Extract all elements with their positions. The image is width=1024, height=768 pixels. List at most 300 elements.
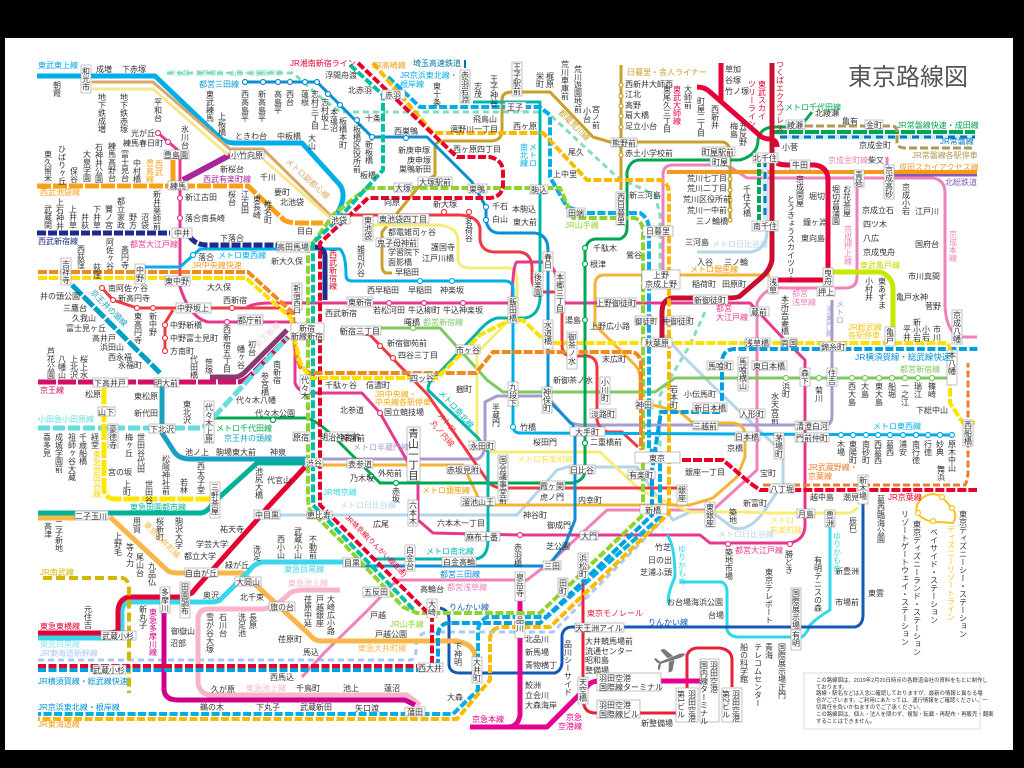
station labels: east: 一之江: [900, 382, 910, 407]
station labels: centre: 日比谷: [570, 465, 594, 475]
station labels: north-east: 八広: [863, 234, 879, 243]
station labels: north-east: 三ノ輪橋: [696, 216, 728, 226]
station labels: south-centre: 矢口渡: [355, 703, 379, 713]
station labels: west: 参宮橋: [260, 371, 270, 397]
station labels: north-west: 東武練馬: [206, 89, 214, 123]
station labels: centre: 西早稲田: [367, 285, 399, 295]
station labels: north-east: 竹ノ塚: [725, 86, 749, 96]
station labels: east: 南砂町: [862, 439, 870, 464]
station labels: north-west: 練馬春日町: [123, 138, 163, 148]
line name labels: 西武新宿線: [328, 250, 338, 291]
station labels: south-west: 都立大学: [184, 551, 216, 561]
line: Yokosuka: [38, 349, 978, 670]
station labels: north-centre: 護国寺: [431, 242, 455, 252]
line name labels: 各駅停車: [848, 330, 880, 340]
station labels: north-east: 本所吾妻橋: [780, 294, 790, 336]
station labels: north-centre: 志茂: [474, 81, 482, 99]
station labels: north-west: 吉祥寺: [62, 260, 70, 284]
station labels: centre: 大手町: [575, 427, 599, 437]
station labels: south-west: 学芸大学: [196, 539, 228, 549]
line: Narita Sky Access: [667, 170, 977, 174]
line name labels: 都営三田線: [199, 79, 239, 89]
station labels: west: 松原: [85, 389, 101, 399]
station labels: north-west: 下赤塚: [122, 65, 146, 74]
line: Tobu Kameido: [833, 272, 893, 335]
line: Namboku: [373, 102, 540, 559]
station labels: west: 西太子堂: [196, 462, 206, 494]
station labels: east: 馬喰横山: [738, 358, 748, 390]
station labels: west: 中野新橋: [170, 320, 202, 330]
station labels: east: 南行徳: [912, 439, 920, 465]
station labels: north-west: 新大久保: [271, 256, 303, 266]
station labels: west: 都庁前: [238, 315, 262, 325]
station labels: north-east: 西新井: [710, 105, 720, 130]
station labels: north-west: 武蔵関: [44, 204, 52, 230]
line name labels: メトロ: [528, 143, 538, 167]
station labels: east: 東大島: [874, 381, 884, 407]
station labels: north-west: 大久保: [207, 282, 231, 292]
station labels: north-centre: 扇大橋: [625, 110, 649, 120]
line name labels: 中央線各駅停車: [375, 397, 431, 407]
station labels: north-centre: 新三河島: [629, 190, 661, 200]
line: Shonan-Shinjuku: [38, 63, 503, 666]
line name labels: 京王新線: [252, 320, 282, 349]
title: 東京路線図: [848, 64, 968, 91]
station labels: south-west: 千鳥町: [296, 683, 320, 693]
station labels: south-west: 高津: [44, 521, 52, 539]
station labels: north-east: 青砥: [854, 170, 864, 187]
station labels: west: 山下: [98, 408, 114, 417]
station labels: west: 芦花公園: [46, 346, 56, 380]
line name labels: メトロ日比谷線: [712, 239, 768, 249]
line name labels: JR常磐線快速・成田線: [897, 120, 979, 130]
station labels: north-east: 市川真間: [908, 271, 940, 281]
station labels: south-centre: 昭和島: [585, 655, 609, 665]
line name labels: 半蔵門線: [826, 304, 834, 338]
station labels: south-centre: 下神明: [454, 642, 462, 667]
station labels: west: [40, 283, 360, 520]
station labels: south-centre: 品川シーサイド: [564, 640, 572, 696]
station labels: north-west: 地下鉄赤塚: [120, 92, 128, 134]
line: Rinkai: [440, 502, 863, 673]
station labels: north-centre: 上中里: [553, 169, 577, 179]
station labels: north-east: 綾瀬: [787, 120, 803, 130]
station labels: west: 富士見ヶ丘: [66, 323, 106, 333]
station labels: south-centre: 目黒: [344, 559, 360, 568]
line: Tokaido Shinkansen: [38, 520, 663, 660]
station labels: west: 明治神宮前: [320, 432, 360, 442]
station labels: east: 森下: [800, 368, 810, 386]
line: Setagaya: [104, 388, 213, 499]
station labels: south-west: 桜新町: [156, 516, 164, 541]
station labels: centre: 岩本町: [670, 384, 678, 409]
station labels: south-centre: お台場海浜公園: [667, 597, 723, 607]
station labels: north-centre: 日暮里: [646, 226, 670, 236]
station labels: south-west: 武蔵新田: [300, 702, 332, 712]
station labels: north-west: 新桜台: [220, 164, 244, 174]
station labels: west: 三鷹台: [63, 303, 87, 313]
station labels: north-centre: 西新井大師西: [625, 79, 673, 89]
station labels: west: 豪徳寺: [108, 424, 118, 449]
station labels: north-east: 四ツ木: [863, 219, 887, 229]
line: Keio New: [210, 330, 287, 377]
line: Chiyoda: [213, 112, 812, 483]
station labels: south-centre: 大崎: [428, 599, 436, 616]
station labels: south-centre: 六本木: [408, 500, 418, 526]
station labels: north-centre: 板橋区役所前: [352, 124, 362, 174]
station labels: west: 神泉: [270, 447, 286, 457]
station labels: north-centre: 早稲田: [395, 267, 419, 277]
station labels: south-west: 石川台: [218, 613, 228, 638]
station labels: west: 池尻大橋: [254, 466, 264, 500]
line: Ikegami: [198, 590, 420, 705]
station labels: west: 代々木: [300, 375, 310, 401]
station labels: west: 世田谷: [144, 479, 154, 505]
station labels: north-east: 堀切菖蒲園: [832, 185, 840, 226]
disclaimer panel: することはできません。: [816, 718, 875, 725]
station labels: north-east: 稲荷町: [692, 279, 716, 289]
line name labels: 日暮里・舎人ライナー: [627, 67, 707, 77]
station labels: south-centre: 市場前: [835, 597, 859, 607]
station labels: north-centre: 十条: [365, 113, 381, 123]
line: Toyoko: [38, 467, 305, 633]
line: Keisei main: [663, 165, 977, 337]
station labels: north-west: 沼袋: [140, 213, 150, 230]
station labels: north-west: 高円寺: [120, 244, 130, 269]
station labels: north-centre: 東池袋: [364, 215, 372, 241]
station labels: south-west: 大崎広小路: [326, 594, 336, 635]
station labels: north-centre: 西日暮里: [616, 193, 626, 225]
station labels: east: 錦糸町: [821, 342, 845, 352]
line name labels: 東武亀戸線: [860, 260, 900, 270]
station labels: south-centre: 辰巳: [848, 517, 858, 533]
station labels: centre: 乃木坂: [350, 473, 374, 483]
line name labels: メトロ千代田線: [785, 102, 841, 112]
station labels: west: 新代田: [134, 408, 158, 418]
station labels: south-centre: 羽田空港: [599, 700, 631, 710]
station labels: south-west: 上野毛: [114, 532, 122, 556]
station labels: centre: 神田: [636, 400, 652, 410]
station labels: north-centre: 新庚申塚: [398, 145, 430, 155]
station labels: north-east: 小村井: [864, 277, 874, 302]
line name labels: JR山手線: [565, 220, 599, 230]
station labels: north-east: 牛田: [792, 160, 808, 170]
station labels: west: 浜田山: [100, 342, 124, 352]
station labels: north-west: 西台: [286, 90, 294, 107]
station labels: west: 新中野: [148, 312, 158, 336]
line: Keikyu main: [470, 600, 700, 727]
line name labels: JR東海道線: [38, 719, 80, 729]
station labels: south-west: 雪が谷大塚: [206, 613, 214, 654]
line: Saikyo: [313, 65, 414, 610]
station labels: south-west: 二子玉川: [75, 512, 107, 521]
station labels: west: 西武新宿: [325, 308, 357, 318]
station labels: east: 日本橋: [735, 432, 759, 442]
station labels: north-east: 三河島: [685, 237, 709, 247]
station labels: east: 浜町: [782, 381, 790, 398]
station labels: centre: 神楽坂: [440, 285, 464, 295]
station labels: north-east: 町屋二丁目: [696, 97, 706, 138]
station labels: north-centre: 梶原: [546, 71, 554, 88]
line name labels: 東京モノレール: [587, 608, 643, 618]
station labels: north-west: 荻窪: [92, 262, 102, 280]
station labels: south-centre: 有明: [792, 630, 800, 648]
station labels: south-centre: 船の科学館: [740, 642, 748, 684]
station labels: south-centre: 立会川: [525, 690, 549, 700]
line name labels: メトロ銀座線: [422, 485, 470, 495]
station labels: centre: 霞ヶ関: [540, 482, 564, 491]
station labels: east: 銀座: [678, 485, 686, 503]
station labels: east: 小伝馬町: [684, 389, 716, 399]
station labels: north-east: 北綾瀬: [815, 108, 839, 118]
line name labels: 京葉線: [808, 471, 832, 481]
station labels: south-centre: 北品川: [525, 635, 549, 644]
station labels: north-centre: 向原: [384, 197, 400, 207]
station labels: east: 葛西臨海公園: [876, 494, 886, 544]
station labels: west: 上北沢: [70, 355, 78, 380]
station labels: east: 下総中山: [916, 405, 948, 415]
station labels: south-west: [44, 511, 336, 712]
line: Hanzomon: [323, 300, 832, 459]
station labels: north-east: 田原町: [722, 280, 746, 289]
station labels: centre: 東京: [649, 453, 665, 463]
station labels: south-centre: 新馬場: [525, 647, 549, 657]
line name labels: JR京浜東北線・: [400, 70, 458, 80]
line name labels: メトロ日比谷線: [340, 500, 396, 510]
station labels: north-centre: 後楽園: [534, 272, 542, 298]
station labels: north-centre: 江戸川橋: [422, 253, 454, 263]
station labels: east: 新日本橋: [694, 403, 726, 413]
station labels: west: 喜多見: [42, 432, 52, 458]
station labels: centre: 東新宿: [348, 297, 372, 307]
station labels: north-west: 新高島平: [258, 90, 266, 123]
line: Disney Resort: [916, 494, 955, 523]
station labels: east: 水天宮前: [770, 391, 780, 425]
line name labels: 東急東横線: [40, 621, 80, 631]
line: Monorail: [583, 580, 732, 713]
station labels: centre: 虎ノ門: [540, 492, 564, 502]
station labels: north-centre: 東尾久三丁目: [662, 84, 672, 134]
station labels: north-west: 千川: [260, 172, 276, 182]
station labels: south-centre: 大井町: [472, 657, 482, 682]
station labels: south-centre: 五反田: [364, 588, 388, 597]
line: Oedo: [158, 133, 805, 543]
station labels: north-centre: 荒川遊園地前: [574, 64, 582, 114]
station labels: east: 東日本橋: [753, 361, 785, 371]
station labels: east: 両国: [781, 339, 797, 348]
line name labels: JR京浜東北線・根岸線: [38, 702, 120, 712]
station labels: north-east: 小菅: [782, 142, 798, 152]
station labels: centre: 永田町: [470, 441, 494, 451]
station labels: north-west: 新江古田: [185, 192, 217, 202]
station labels: centre: 神保町: [542, 387, 552, 412]
station labels: east: 行徳: [924, 439, 932, 457]
station labels: centre: 秋葉原: [645, 338, 669, 348]
station labels: north-east: 京成曳舟: [863, 247, 895, 257]
line: Tozai: [143, 249, 952, 435]
line: Yamanote: [308, 188, 643, 613]
station labels: centre: 青山一丁目: [407, 427, 419, 480]
line: Yurakucho north: [373, 225, 517, 450]
station labels: north-west: 落合: [198, 252, 214, 262]
line name labels: りんかい線: [648, 617, 688, 627]
station labels: north-centre: 飯田橋: [508, 298, 518, 323]
line: Nambu: [43, 578, 129, 693]
station labels: north-centre: 王子神谷: [490, 75, 498, 108]
station labels: north-west: 上板橋: [218, 112, 226, 137]
station labels: east: 茅場町: [774, 433, 784, 458]
line: Tsukuba Express: [662, 63, 772, 340]
station labels: south-west: 二子新地: [54, 520, 64, 552]
station labels: south-centre: 御成門: [547, 520, 571, 530]
station labels: west: 駒場東大前: [216, 447, 256, 457]
station labels: north-east: 草加: [725, 64, 741, 74]
station labels: Tokyo Disney Resort: 東京ディズニーシー・ステーション: [958, 509, 968, 638]
station labels: west: 新高円寺: [118, 293, 150, 303]
disclaimer panel: 合がございます。ご利用にあたっては、運行情報をご確認ください。一: [816, 696, 988, 704]
station labels: south-west: 荏原中延: [304, 595, 312, 628]
station labels: south-centre: 整備場: [585, 665, 609, 675]
station labels: north-centre: 鶯谷: [626, 250, 642, 260]
station labels: north-centre: 茗荷谷: [464, 217, 474, 243]
station labels: north-east: 大師前: [684, 84, 692, 110]
station labels: centre: 九段下: [508, 383, 518, 408]
station labels: south-west: 沼部: [170, 639, 186, 648]
station labels: south-west: 新丸子: [138, 605, 148, 630]
station labels: north-west: 桜台: [228, 189, 236, 207]
station labels: north-centre: 大塚駅前: [419, 177, 451, 187]
station labels: north-centre: 千石: [492, 201, 508, 211]
station labels: north-east: 堀切: [809, 192, 825, 201]
station labels: west: 西永福: [108, 352, 132, 362]
line end marker: Saitama Rapid Railway: [464, 60, 466, 68]
station labels: north-west: 中村橋: [132, 158, 142, 184]
station labels: centre: 国会議事堂前: [498, 456, 508, 505]
station labels: centre: 蔵前: [751, 307, 767, 317]
station labels: centre: 湯島: [565, 315, 581, 325]
station labels: north-centre: 京成上野: [645, 279, 677, 289]
line name labels: ディズニーリゾートライン: [946, 524, 956, 621]
line name labels: 東急池上線: [288, 578, 328, 588]
station labels: east: 新富町: [743, 498, 767, 508]
line: Shinkansen Joetsu/Tohoku: [167, 73, 705, 450]
station labels: west: 中野富士見町: [170, 333, 218, 343]
station labels: west: 幡ヶ谷: [236, 344, 246, 370]
line name labels: 埼玉高速鉄道: [413, 58, 461, 68]
station labels: north-east: 町屋駅前: [702, 147, 734, 157]
line name labels: 東急大井町線: [358, 643, 406, 653]
disclaimer panel: ております。: [816, 684, 848, 691]
station labels: north-centre: 足立小台: [625, 121, 657, 131]
line name labels: 東急目黒線: [284, 564, 324, 574]
station labels: west: 代々木八幡: [236, 395, 276, 405]
station labels: centre: 麹町: [456, 384, 472, 394]
station labels: centre: 上野御徒町: [596, 298, 636, 308]
station labels: north-centre: 東大前: [513, 217, 537, 227]
line name labels: 有楽町線: [770, 525, 802, 535]
line name labels: 京成本線: [948, 230, 958, 263]
station labels: west: 南新宿: [272, 359, 282, 385]
line name labels: JR南武線: [40, 567, 74, 577]
line name labels: 京急本線: [472, 714, 504, 724]
station labels: south-centre: 国際展示場: [792, 589, 800, 630]
line name labels: 都営浅草線: [447, 582, 487, 592]
station labels: north-east: 柴又: [868, 155, 884, 165]
station labels: Tokyo Disney Resort: [900, 509, 968, 656]
station labels: south-west: 自由が丘: [185, 568, 217, 578]
stations: round markers: [100, 80, 954, 546]
line name labels: 東急大井町線: [142, 519, 183, 560]
station labels: north-west: 志村坂上: [320, 97, 330, 130]
station labels: east: 西船橋: [964, 421, 972, 446]
station labels: south-centre: 浜松町: [578, 553, 588, 578]
station labels: west: 三軒茶屋: [210, 483, 220, 516]
line name labels: 小田急小田原線: [38, 414, 94, 424]
station labels: south-west: 多摩川: [160, 587, 170, 612]
station labels: south-west: 武蔵小山: [294, 526, 302, 559]
station labels: north-centre: 滝野川一丁目: [450, 124, 498, 134]
station labels: east: 馬喰町: [708, 361, 732, 371]
line name labels: JR武蔵野線・: [808, 462, 858, 472]
station labels: east: 三越前: [693, 421, 717, 431]
station labels: north-east: 三ノ輪: [724, 257, 748, 267]
line name labels: メトロ南北線: [437, 388, 476, 430]
line: Tamagawa: [164, 610, 415, 705]
station labels: south-centre: 日の出: [648, 555, 672, 565]
station labels: east: 妙典: [936, 439, 944, 457]
line name labels: JR中央線快速: [192, 260, 242, 270]
station labels: south-centre: テレコムセンター: [754, 643, 762, 707]
station labels: north-centre: 小台: [582, 107, 592, 124]
station labels: north-west: 保谷: [70, 166, 78, 184]
station labels: east: 西葛西: [874, 440, 882, 465]
station labels: north-east: [683, 64, 962, 385]
line name labels: メトロ千代田線: [216, 423, 272, 433]
line name labels: 西武新宿線: [38, 236, 78, 246]
station labels: north-east: 亀戸水神: [896, 292, 928, 302]
station labels: centre: 国立競技場: [384, 407, 424, 417]
station labels: west: 梅ヶ丘: [124, 432, 134, 457]
station labels: east: 門前仲町: [796, 433, 828, 443]
line: Chuo-Sobu local: [38, 278, 975, 423]
station labels: centre: 淡路町: [591, 409, 615, 419]
line: Keisei Kanamachi: [886, 157, 888, 180]
station labels: north-centre: 池袋: [331, 215, 347, 225]
station labels: south-centre: 台場: [708, 610, 724, 620]
station labels: east: 住吉: [828, 368, 836, 386]
station labels: north-east: 国府台: [915, 239, 939, 249]
line: Seibu Yurakucho pale: [92, 89, 335, 222]
station labels: north-centre: 都電雑司ヶ谷: [388, 227, 436, 237]
station labels: north-west: 野方: [128, 213, 138, 230]
station labels: north-east: 荒川七丁目: [687, 173, 727, 183]
station labels: south-west: 緑が丘: [225, 560, 249, 570]
station labels: south-centre: 竹芝: [655, 542, 671, 552]
station labels: south-centre: 戸越: [370, 610, 386, 620]
station labels: south-west: 尾山台: [136, 553, 144, 578]
station labels: north-east: 押上: [818, 287, 834, 297]
station labels: north-west: 成増: [96, 64, 112, 74]
station labels: north-centre: 板橋: [360, 170, 376, 180]
station labels: centre: 新橋: [645, 505, 661, 515]
line: Hibiya: [280, 170, 783, 529]
station labels: north-east: 京成立石: [862, 205, 894, 215]
line name labels: 空港線: [558, 721, 582, 731]
station labels: south-west: 馬込: [303, 648, 319, 657]
station labels: centre: 早稲田: [408, 285, 432, 295]
station labels: north-west: 和光市: [82, 67, 90, 92]
station labels: south-centre: 高輪台: [420, 584, 444, 594]
